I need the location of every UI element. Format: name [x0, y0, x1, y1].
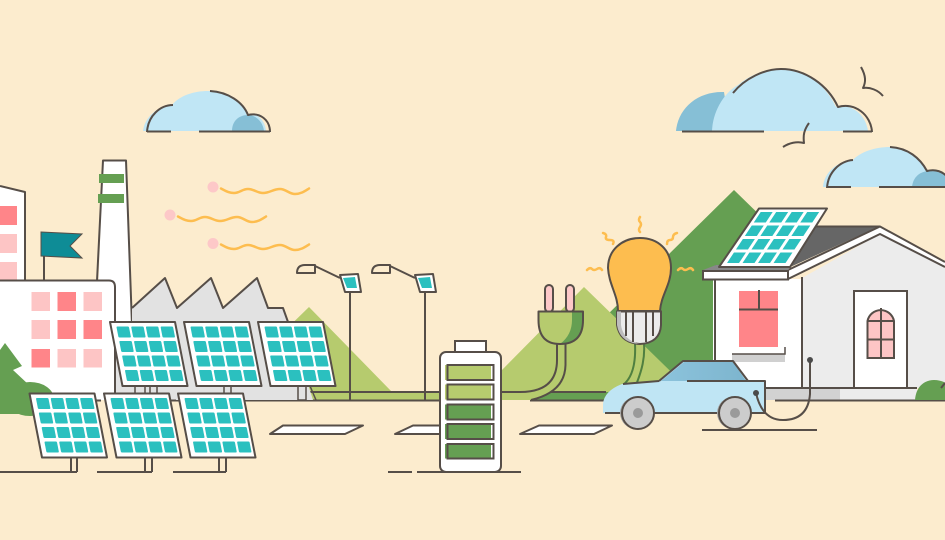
heat waves	[164, 182, 309, 250]
battery cell 4	[445, 424, 494, 439]
solar panel: bottom row 3	[178, 394, 256, 458]
charging cable	[753, 357, 813, 420]
bush and tree	[0, 343, 54, 416]
solar panel: top row 3	[258, 322, 336, 386]
battery cell 1	[445, 365, 494, 380]
flag	[41, 232, 82, 280]
mountain: light green centre	[500, 287, 700, 400]
eave	[703, 265, 790, 280]
street lamp 2	[372, 265, 436, 400]
bush right	[915, 380, 945, 400]
cloud: right	[823, 147, 945, 188]
bulb glass	[608, 238, 671, 311]
wall lines	[715, 277, 917, 388]
cloud: top left	[143, 91, 270, 132]
bulb base	[617, 312, 661, 344]
bulb light rays	[587, 217, 693, 270]
street lamp 1	[297, 265, 361, 400]
door	[854, 291, 907, 388]
battery	[440, 341, 501, 472]
bottom panel stands and ground	[0, 400, 226, 472]
wheel front	[620, 397, 654, 429]
building: left tower	[0, 186, 25, 282]
chimney	[97, 160, 132, 325]
cloud: large top right	[676, 69, 872, 132]
battery cell 5	[445, 444, 494, 458]
plug and cord	[500, 285, 583, 400]
window	[732, 290, 785, 362]
roof solar panel	[719, 208, 827, 267]
wheel rear	[717, 397, 751, 429]
solar panel: bottom row 1	[30, 394, 107, 458]
birds	[783, 67, 883, 147]
mountain: dark green right	[600, 190, 790, 392]
solar panel: top row 2	[184, 322, 262, 386]
battery cell 3	[445, 404, 494, 420]
factory sheds	[115, 278, 313, 400]
house left wall	[713, 279, 802, 389]
battery ground lines	[388, 471, 521, 473]
solar panel stands	[135, 386, 316, 400]
road markings	[270, 426, 612, 434]
solar panel: bottom row 2	[104, 394, 182, 458]
ground lines	[115, 392, 606, 400]
bulb wires	[622, 344, 644, 385]
house	[703, 226, 945, 389]
driveway	[765, 389, 945, 400]
mountain: light green left	[270, 307, 440, 400]
solar panel: top row 1	[110, 322, 188, 386]
roof dark	[715, 226, 880, 268]
gable trim	[788, 226, 945, 279]
light bulb	[608, 238, 671, 385]
house right wall	[802, 234, 945, 388]
car	[603, 361, 765, 429]
car ground line	[702, 429, 817, 431]
battery cell 2	[445, 384, 494, 400]
ground strip: dark green under centre	[531, 392, 612, 400]
factory main building	[0, 280, 115, 400]
